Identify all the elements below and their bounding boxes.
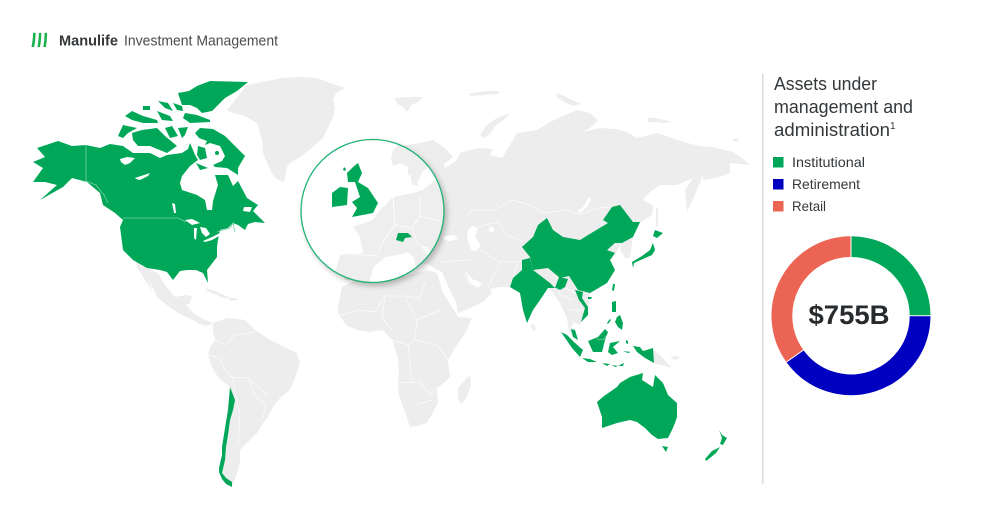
UK xyxy=(347,163,378,217)
Philippines xyxy=(612,301,616,312)
Tasmania xyxy=(662,446,668,452)
Sulawesi xyxy=(608,341,620,355)
Prince Charles Island xyxy=(215,151,219,155)
Ireland xyxy=(332,187,348,207)
Switzerland xyxy=(396,233,412,242)
Caspian Sea xyxy=(467,226,481,251)
Novaya Zemlya xyxy=(480,113,510,138)
Taiwan xyxy=(612,284,615,291)
map: grey countries xyxy=(134,77,750,487)
inset shadow xyxy=(303,142,447,286)
donut chart xyxy=(782,236,931,385)
logo: Manulife Investment Management xyxy=(32,32,279,50)
Sakhalin xyxy=(656,208,658,228)
India xyxy=(510,258,568,323)
Svalbard xyxy=(395,97,423,112)
legend: Retail: Retail xyxy=(792,198,826,214)
Eurasia xyxy=(338,110,750,338)
Banks Island xyxy=(118,125,137,138)
legend xyxy=(773,154,865,214)
Prince of Wales and Somerset xyxy=(165,126,178,138)
Australia xyxy=(597,373,677,439)
Great Lakes xyxy=(185,219,200,225)
inset circle: UK and Switzerland xyxy=(301,140,450,292)
Chile xyxy=(219,387,235,487)
Queen Elizabeth islands xyxy=(173,103,183,111)
Arctic Russian islands xyxy=(468,91,500,96)
Melville Peninsula xyxy=(197,146,207,160)
Hainan xyxy=(588,297,592,299)
Black Sea xyxy=(443,235,458,241)
inset ring xyxy=(301,140,444,282)
map: light borders on green countries xyxy=(86,145,607,340)
icon: Manulife three bars xyxy=(32,33,47,47)
Vietnam xyxy=(575,290,588,322)
Lake Winnipeg xyxy=(172,203,176,213)
Ellesmere Island xyxy=(178,81,248,113)
legend: Institutional: Institutional xyxy=(792,154,865,170)
panel heading: Assets under xyxy=(774,73,877,94)
panel: assets under management xyxy=(773,73,931,385)
Devon Island xyxy=(183,113,210,123)
Japan xyxy=(653,230,663,238)
Papua New Guinea xyxy=(653,350,672,368)
donut total: $755B xyxy=(808,300,890,330)
panel heading: 1 xyxy=(890,121,896,132)
Java and lesser islands xyxy=(582,358,597,362)
Victoria Island xyxy=(132,128,177,153)
Baffin Island xyxy=(195,128,245,175)
Malaysia peninsula xyxy=(571,329,578,340)
map: inland seas in white xyxy=(437,197,591,312)
Baikal xyxy=(577,197,591,213)
logo wordmark: Manulife xyxy=(59,32,118,50)
Greenland xyxy=(227,77,345,182)
legend: Retirement: Retirement xyxy=(792,176,860,192)
inset: Europe map xyxy=(332,146,444,282)
Aral Sea xyxy=(489,227,494,232)
Red Sea and Persian Gulf xyxy=(437,270,458,312)
Canada and USA mainland xyxy=(33,141,265,283)
map: green countries xyxy=(33,81,727,487)
Caribbean islands xyxy=(205,288,232,299)
Borneo xyxy=(588,329,608,352)
Africa xyxy=(338,270,472,427)
map: light country borders xyxy=(208,200,612,445)
Sumatra xyxy=(561,332,583,357)
South America xyxy=(208,318,300,487)
Great Bear and Great Slave lakes xyxy=(120,157,135,165)
world map xyxy=(33,77,750,487)
Sri Lanka xyxy=(531,323,536,331)
Madagascar xyxy=(458,375,471,404)
China xyxy=(522,205,640,293)
panel heading: management and xyxy=(774,96,913,117)
West New Guinea xyxy=(633,346,654,363)
Mexico and Central America xyxy=(134,260,213,326)
vertical divider xyxy=(762,74,763,484)
Gulf of St Lawrence xyxy=(243,207,252,212)
Southampton Island xyxy=(196,163,208,170)
logo wordmark: Investment Management xyxy=(124,32,279,50)
New Zealand xyxy=(719,430,727,445)
panel heading: administration xyxy=(774,119,890,140)
